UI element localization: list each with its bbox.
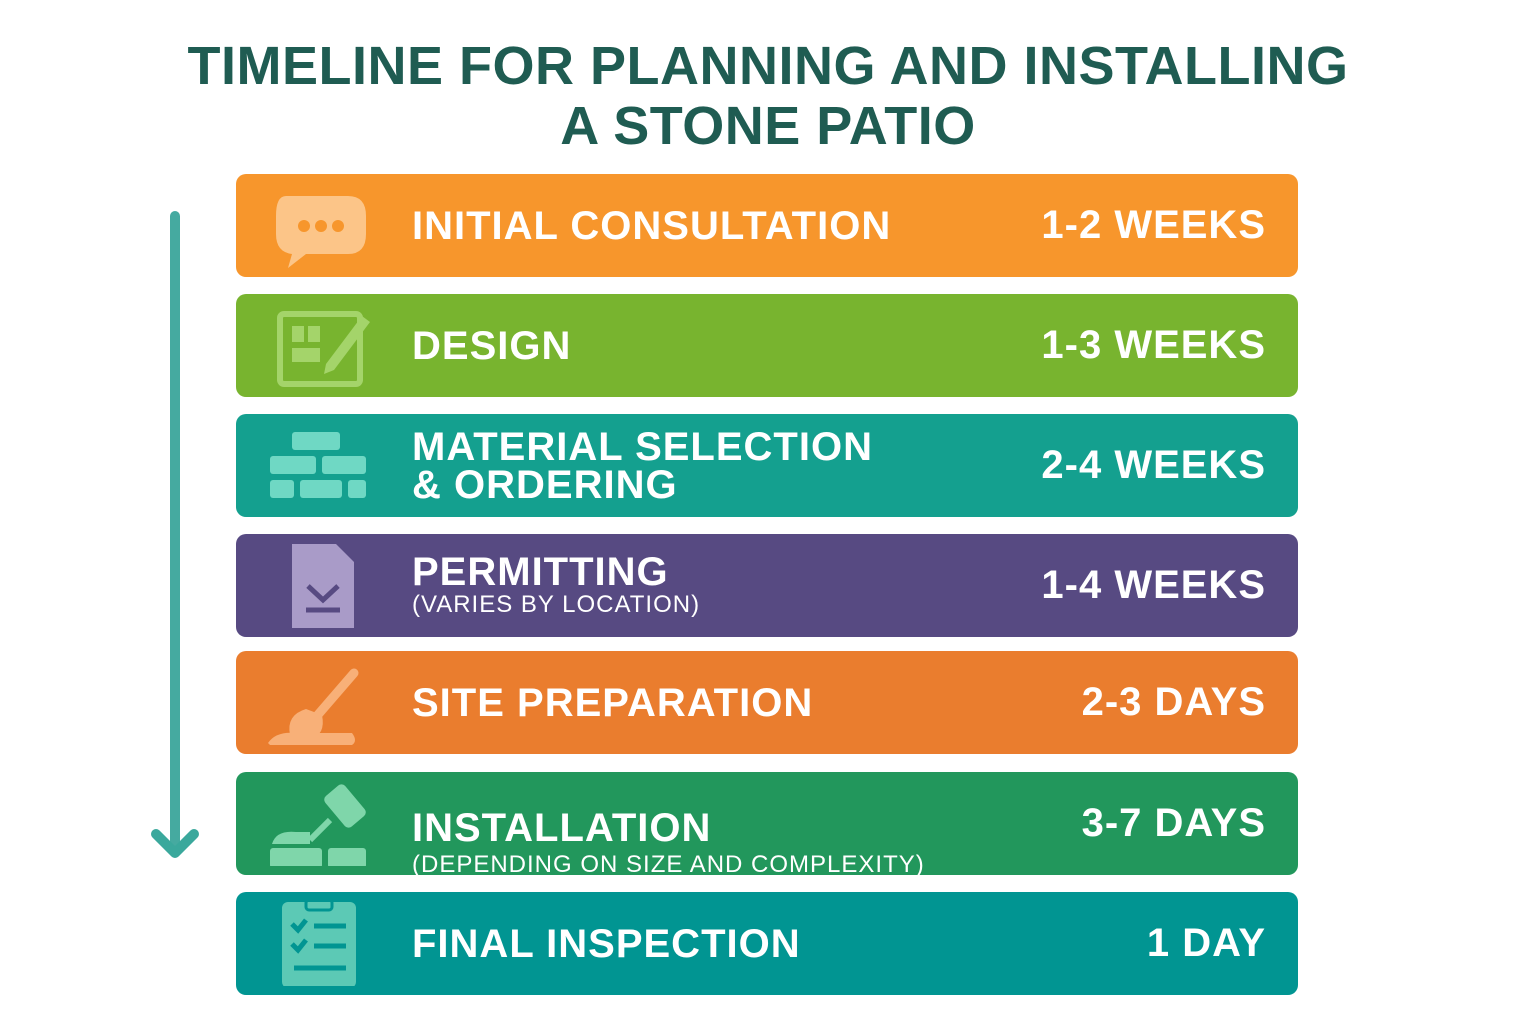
panel: initial consultation: 1-2 WEEKS: [1041, 203, 1266, 247]
panel: design: 1-3 WEEKS: [1041, 323, 1266, 367]
panel: installation: [236, 772, 1298, 875]
panel: material selection: MATERIAL SELECTION: [412, 424, 873, 468]
icon: mallet and stones: [270, 784, 366, 866]
panel: design: [236, 294, 1298, 397]
arrow: timeline: [151, 211, 199, 858]
title: A STONE PATIO: [560, 96, 976, 156]
panel: permitting: [236, 534, 1298, 637]
panel: permitting: PERMITTING: [412, 550, 669, 594]
panel: site preparation: 2-3 DAYS: [1082, 680, 1266, 724]
icon: shovel: [268, 668, 358, 745]
panel: material selection: 2-4 WEEKS: [1041, 443, 1266, 487]
panel: permitting: 1-4 WEEKS: [1041, 563, 1266, 607]
panel: site preparation: [236, 651, 1298, 754]
panel: installation: (DEPENDING ON SIZE AND COMPLEXITY): [412, 850, 925, 878]
title: TIMELINE FOR PLANNING AND INSTALLING: [188, 36, 1348, 96]
icon: bricks: [270, 432, 366, 498]
panel: permitting: (VARIES BY LOCATION): [412, 590, 700, 618]
panel: site preparation: SITE PREPARATION: [412, 680, 813, 724]
panel: final inspection: 1 DAY: [1147, 921, 1266, 965]
icon: document: [292, 544, 354, 628]
title: [188, 36, 1348, 156]
panel: material selection: & ORDERING: [412, 462, 678, 506]
panel: installation: INSTALLATION: [412, 806, 711, 850]
panel: initial consultation: [236, 174, 1298, 277]
panel: initial consultation: INITIAL CONSULTATION: [412, 204, 891, 248]
panel: final inspection: FINAL INSPECTION: [412, 922, 801, 966]
icon: speech bubble: [276, 196, 366, 268]
panel: final inspection: [236, 892, 1298, 995]
panel: material selection: [236, 414, 1298, 517]
icon: design plan: [277, 311, 370, 387]
icon: checklist: [282, 902, 356, 986]
panel: installation: 3-7 DAYS: [1082, 801, 1266, 845]
panel: design: DESIGN: [412, 324, 571, 368]
